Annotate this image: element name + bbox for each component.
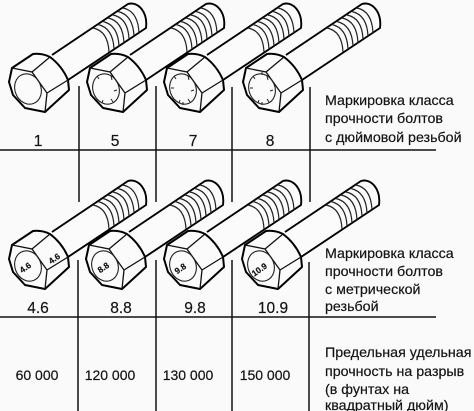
text: inch thread caption: Маркировка класса	[325, 93, 454, 109]
bolt: metric grade 8.8: 8.8	[96, 260, 111, 275]
tensile strength values: 150 000	[240, 367, 291, 383]
inch grade labels: 5	[111, 133, 119, 150]
bolt: inch grade 5	[87, 4, 224, 112]
text: metric thread caption: прочности болтов	[325, 264, 443, 280]
bolt: metric grade 8.8	[86, 181, 223, 289]
metric grade labels	[27, 300, 288, 317]
tensile strength values: 60 000	[16, 367, 59, 383]
inch grade labels: 8	[266, 133, 274, 150]
bolt: metric grade 10.9: 10.9	[250, 261, 269, 278]
table grid lines	[0, 86, 436, 411]
bolt: metric grade 4.6	[9, 181, 146, 289]
tensile strength values	[16, 367, 291, 383]
text: tensile strength caption: (в фунтах на	[325, 382, 409, 398]
bolt: metric grade 4.6: 4.6	[18, 260, 33, 275]
metric grade labels: 4.6	[27, 300, 49, 317]
text: inch thread caption: прочности болтов	[325, 111, 443, 127]
metric grade labels: 10.9	[258, 300, 288, 317]
text: metric thread caption	[325, 246, 454, 315]
text: tensile strength caption: Предельная удельная	[325, 345, 471, 361]
bolt: inch grade 8	[243, 4, 380, 112]
inch grade labels: 1	[34, 133, 42, 150]
text: tensile strength caption	[325, 345, 471, 411]
bolt: metric grade 9.8	[164, 181, 301, 289]
metric grade labels: 8.8	[110, 300, 132, 317]
bolt: inch grade 1	[9, 4, 146, 112]
bolt: inch grade 7	[164, 4, 301, 112]
text: metric thread caption: с метрической	[325, 282, 420, 298]
text: inch thread caption: с дюймовой резьбой	[325, 130, 462, 146]
metric grade labels: 9.8	[184, 300, 206, 317]
text: metric thread caption: резьбой	[325, 299, 379, 315]
text: tensile strength caption: прочность на разрыв	[325, 364, 464, 380]
bolt: metric grade 9.8: 9.8	[173, 261, 188, 276]
text: inch thread caption	[325, 93, 462, 146]
inch grade labels: 7	[189, 133, 197, 150]
bolt: metric grade 4.6: 4.6	[47, 251, 62, 266]
tensile strength values: 130 000	[163, 367, 214, 383]
tensile strength values: 120 000	[85, 367, 136, 383]
inch grade labels	[34, 133, 274, 150]
bolt: metric grade 10.9	[242, 181, 379, 289]
text: metric thread caption: Маркировка класса	[325, 246, 454, 262]
